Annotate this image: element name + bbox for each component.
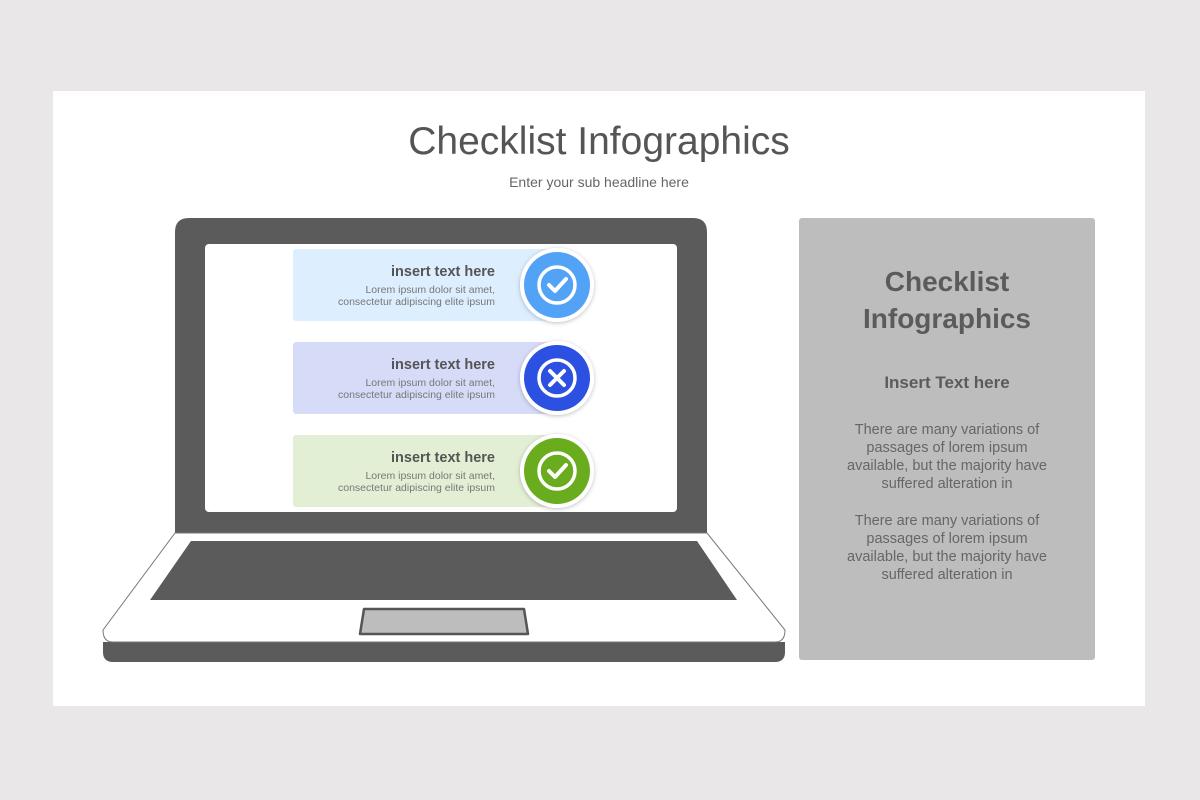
side panel [799, 218, 1095, 660]
laptop [103, 218, 785, 662]
card background [53, 91, 1145, 706]
item 3: Lorem ipsum dolor sit amet, [365, 470, 495, 482]
laptop base [103, 642, 785, 662]
panel paragraph 1: available, but the majority have [847, 458, 1047, 474]
item 2: Lorem ipsum dolor sit amet, [365, 377, 495, 389]
trackpad [360, 609, 528, 634]
icon: check [520, 248, 594, 322]
panel paragraph 2: suffered alteration in [881, 567, 1013, 583]
panel paragraph 1 [847, 422, 1047, 492]
item 2: insert text here [391, 357, 495, 373]
panel paragraph 2 [847, 513, 1047, 583]
title: Checklist Infographics [408, 120, 790, 163]
item 1 [293, 248, 594, 322]
laptop screen [175, 218, 707, 533]
item 2: consectetur adipiscing elite ipsum [338, 389, 495, 401]
side panel: Infographics [863, 303, 1031, 334]
panel paragraph 2: passages of lorem ipsum [866, 531, 1028, 547]
panel paragraph 2: available, but the majority have [847, 549, 1047, 565]
item 3: consectetur adipiscing elite ipsum [338, 482, 495, 494]
panel paragraph 1: passages of lorem ipsum [866, 440, 1028, 456]
item 3 [293, 434, 594, 508]
item 1: consectetur adipiscing elite ipsum [338, 296, 495, 308]
panel paragraph 1: suffered alteration in [881, 476, 1013, 492]
item 3: insert text here [391, 450, 495, 466]
item 1: insert text here [391, 264, 495, 280]
panel paragraph 2: There are many variations of [855, 513, 1040, 529]
panel heading: Checklist [885, 266, 1009, 297]
item 1: Lorem ipsum dolor sit amet, [365, 284, 495, 296]
subtitle: Enter your sub headline here [509, 174, 689, 190]
icon: check green [520, 434, 594, 508]
panel subheading: Insert Text here [884, 373, 1010, 392]
item 2 [293, 341, 594, 415]
keyboard [150, 541, 737, 600]
icon: cross [520, 341, 594, 415]
panel paragraph 1: There are many variations of [855, 422, 1040, 438]
